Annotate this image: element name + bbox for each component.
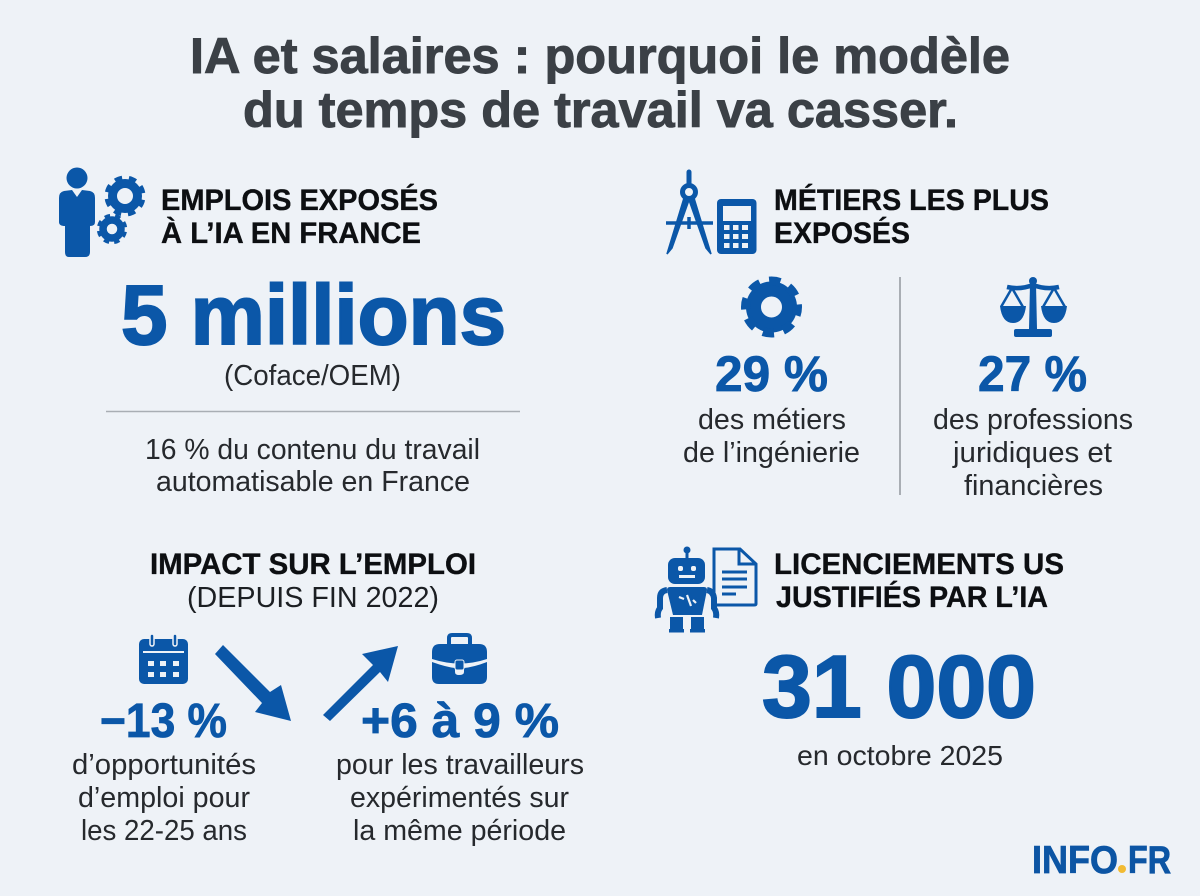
- heading: impact: IMPACT SUR L’EMPLOI: [150, 548, 476, 581]
- stat: +6 à 9 %: [336, 695, 584, 847]
- heading: licenciements: LICENCIEMENTS US: [774, 548, 1064, 581]
- stat: juridiques: 27 %: [978, 346, 1087, 402]
- heading: emplois exposés: [161, 183, 438, 250]
- icon: person with gears: [59, 168, 146, 257]
- stat: -13 %: les 22-25 ans: [81, 815, 247, 847]
- stat: ingénierie: des métiers: [698, 404, 846, 436]
- logo: INFO.FR: INFO: [1032, 839, 1118, 882]
- heading: impact: (DEPUIS FIN 2022): [187, 582, 439, 614]
- stat: +6 à 9 %: expérimentés sur: [350, 782, 569, 814]
- arrow: down: [215, 645, 291, 721]
- text: automatisable: automatisable en France: [156, 466, 470, 498]
- stat: juridiques: des professions: [933, 404, 1133, 436]
- stat: juridiques: financières: [964, 470, 1103, 502]
- title: IA et salaires : pourquoi le modèle: [190, 28, 1010, 84]
- icon: robot and document: [658, 546, 756, 632]
- stat: +6 à 9 %: la même période: [353, 815, 566, 847]
- text: automatisable: [145, 434, 480, 498]
- heading: licenciements: JUSTIFIÉS PAR L’IA: [776, 580, 1048, 614]
- stat: ingénierie: 29 %: [715, 346, 828, 402]
- icon: scales: [1000, 277, 1067, 337]
- heading: métiers: MÉTIERS LES PLUS: [774, 183, 1049, 217]
- panel: emplois exposés: [59, 168, 520, 498]
- arrow: up: [323, 646, 398, 721]
- logo: INFO.FR: FR: [1128, 839, 1171, 882]
- logo: INFO.FR: [1032, 839, 1171, 882]
- stat: ingénierie: [683, 346, 860, 469]
- heading: impact: [150, 548, 476, 614]
- title: [190, 28, 1010, 138]
- source: (Coface/OEM): [224, 360, 401, 392]
- heading: emplois exposés: À L’IA EN FRANCE: [161, 216, 421, 250]
- heading: métiers: EXPOSÉS: [774, 216, 910, 250]
- big number: 31 000: 31 000: [762, 637, 1036, 736]
- stat: -13 %: d’emploi pour: [78, 782, 250, 814]
- stat: ingénierie: de l’ingénierie: [683, 437, 860, 469]
- stat: -13 %: [72, 695, 256, 847]
- stat: +6 à 9 %: +6 à 9 %: [361, 695, 559, 748]
- stat: -13 %: −13 %: [100, 695, 227, 748]
- heading: licenciements: [774, 548, 1064, 614]
- stat: +6 à 9 %: pour les travailleurs: [336, 749, 584, 781]
- icon: compass and calculator: [666, 172, 756, 254]
- stat: juridiques: juridiques et: [952, 437, 1112, 469]
- date: en octobre 2025: [797, 740, 1003, 771]
- text: automatisable: 16 % du contenu du travail: [145, 434, 480, 466]
- stat: -13 %: d’opportunités: [72, 749, 256, 781]
- icon: gear: [743, 279, 800, 335]
- icon: briefcase: [432, 635, 487, 684]
- title: du temps de travail va casser.: [243, 82, 958, 138]
- panel: licenciements US: [658, 546, 1064, 771]
- big number: 5 millions: 5 millions: [121, 268, 506, 362]
- panel: métiers les plus exposés: [666, 172, 1133, 502]
- heading: emplois exposés: EMPLOIS EXPOSÉS: [161, 183, 438, 217]
- panel: impact sur l'emploi: [72, 548, 584, 847]
- heading: métiers: [774, 183, 1049, 250]
- stat: juridiques: [933, 346, 1133, 502]
- icon: calendar: [139, 634, 188, 684]
